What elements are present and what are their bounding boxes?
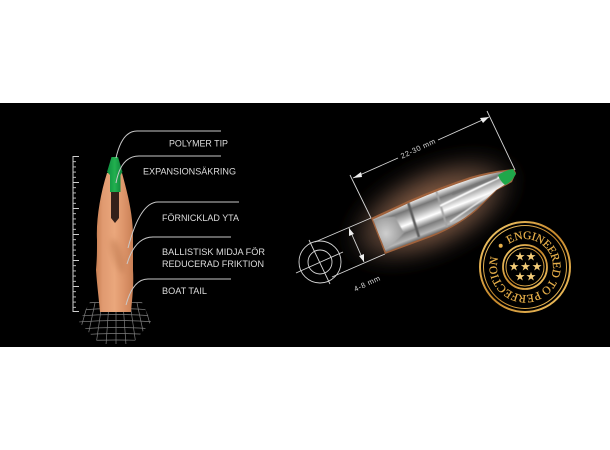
body shading — [108, 237, 128, 275]
callout lines — [116, 131, 239, 305]
label: length: 22-30 mm — [399, 136, 437, 161]
badge stars: ★ — [520, 260, 531, 274]
badge dot — [499, 244, 503, 248]
label: width: 4-8 mm — [352, 273, 382, 294]
icon: green bullet tip — [498, 169, 516, 185]
right section: bullet side view with dimensions — [296, 111, 538, 294]
label: ballistic waist: BALLISTISK MIDJA FÖR — [162, 247, 266, 257]
label: ballistic waist: REDUCERAD FRIKTION — [162, 259, 264, 269]
badge stars: ★ — [526, 250, 536, 264]
label: polymer tip: POLYMER TIP — [169, 138, 228, 148]
black band background — [0, 103, 610, 347]
badge stars: ★ — [526, 270, 536, 284]
label: expansion lock: EXPANSIONSÄKRING — [143, 166, 236, 176]
badge stars: ★ — [532, 260, 542, 274]
badge stars: ★ — [515, 270, 525, 284]
diagram: copper bullet body — [96, 173, 133, 312]
bullet ogive streaks — [440, 177, 500, 206]
badge stars: ★ — [515, 250, 525, 264]
waist shadow — [408, 202, 419, 237]
dimension arrowheads — [349, 117, 489, 262]
silver bullet body — [373, 172, 511, 252]
icon: measuring ruler — [73, 156, 79, 312]
badge: engineered to perfection — [479, 221, 571, 313]
left section: bullet cross-section with labels — [66, 131, 266, 345]
label: boat tail: BOAT TAIL — [162, 286, 207, 296]
dark cavity — [111, 192, 119, 223]
glow behind bullet — [326, 128, 538, 292]
badge stars — [509, 250, 542, 284]
badge rings — [480, 222, 570, 312]
base cap — [374, 217, 404, 250]
icon: green polymer tip — [107, 157, 122, 192]
copper outline — [371, 169, 516, 254]
dimension lines — [296, 111, 515, 284]
perspective grid under bullet — [79, 302, 151, 344]
badge stars: ★ — [509, 260, 519, 274]
label: nickel-plated surface: FÖRNICKLAD YTA — [162, 213, 239, 223]
infographic canvas — [0, 103, 610, 347]
badge text: ENGINEERED TO PERFECTION — [489, 231, 561, 303]
